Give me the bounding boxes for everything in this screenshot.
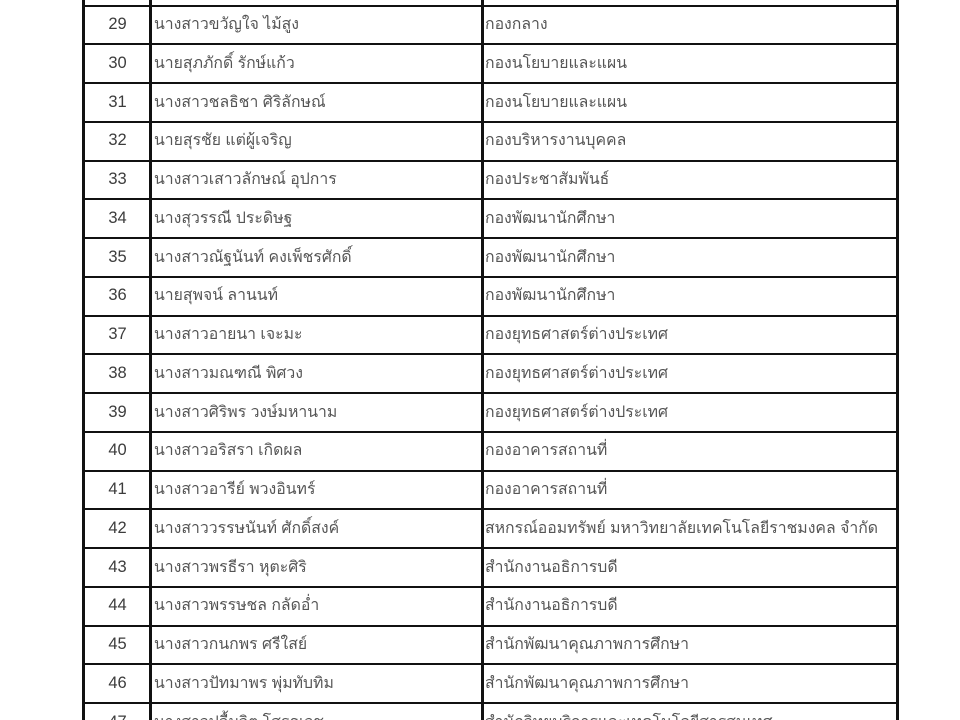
table row 34: นางสุวรรณี ประดิษฐ [154, 210, 292, 227]
table row 45: นางสาวกนกพร ศรีใสย์ [154, 636, 307, 653]
table row 37: กองยุทธศาสตร์ต่างประเทศ [485, 326, 668, 343]
table row 39 [108, 402, 668, 422]
table row 45 [108, 634, 689, 654]
table row 39: นางสาวศิริพร วงษ์มหานาม [154, 404, 337, 420]
table row 41: นางสาวอารีย์ พวงอินทร์ [154, 481, 315, 498]
table row 38: 38 [108, 364, 127, 382]
table row 37 [108, 325, 668, 344]
table row 40: 40 [108, 441, 127, 459]
table row 37: นางสาวอายนา เจะมะ [154, 326, 302, 343]
table row 45: สำนักพัฒนาคุณภาพการศึกษา [485, 636, 689, 653]
table row 37: 37 [108, 325, 127, 343]
table row 43 [108, 558, 618, 576]
table row 31 [108, 92, 627, 110]
table row 34: 34 [108, 209, 127, 227]
table row 29: นางสาวขวัญใจ ไม้สูง [154, 16, 299, 33]
table row 29: กองกลาง [485, 16, 548, 33]
table row 40 [108, 438, 607, 459]
table row 39: 39 [108, 402, 127, 420]
table row 30: กองนโยบายและแผน [485, 55, 627, 72]
table row 35: 35 [108, 248, 127, 266]
table row 33: กองประชาสัมพันธ์ [485, 171, 609, 188]
table row 35: กองพัฒนานักศึกษา [485, 248, 615, 266]
table row 46: 46 [108, 674, 127, 692]
table row 31: กองนโยบายและแผน [485, 94, 627, 110]
table row 44: 44 [108, 596, 127, 614]
table row 35 [108, 245, 615, 266]
table row 29 [108, 14, 548, 33]
table row 34 [108, 209, 615, 228]
table row 45: 45 [108, 635, 127, 653]
table row 42: สหกรณ์ออมทรัพย์ มหาวิทยาลัยเทคโนโลยีราชมงคล จำกัด [485, 520, 878, 537]
table row 39: กองยุทธศาสตร์ต่างประเทศ [485, 404, 668, 420]
table row 33: 33 [108, 170, 127, 188]
table row 32: นายสุรชัย แต่ผู้เจริญ [154, 132, 292, 149]
table row 41 [108, 478, 607, 498]
table row 42 [108, 516, 878, 537]
table row 30: นายสุภภักดิ์ รักษ์แก้ว [154, 55, 295, 72]
table row 38: กองยุทธศาสตร์ต่างประเทศ [485, 365, 668, 382]
table row 32: 32 [108, 131, 127, 149]
table row 30: 30 [108, 54, 127, 72]
table row 46: สำนักพัฒนาคุณภาพการศึกษา [485, 675, 689, 692]
table row 43: 43 [108, 558, 127, 576]
table row 46 [108, 674, 689, 692]
table row 42: 42 [108, 519, 127, 537]
table row 32 [108, 131, 626, 150]
table row 44 [108, 594, 618, 614]
table row 46: นางสาวปัทมาพร พุ่มทับทิม [154, 675, 334, 692]
table row 41: 41 [108, 480, 127, 498]
table row 36: กองพัฒนานักศึกษา [485, 287, 615, 304]
table row 43: สำนักงานอธิการบดี [485, 558, 618, 576]
table row 44: นางสาวพรรษชล กลัดอ่ำ [154, 597, 319, 614]
table row 29: 29 [108, 15, 127, 33]
table row 41: กองอาคารสถานที่ [485, 481, 607, 498]
table row 38: นางสาวมณฑณี พิศวง [154, 365, 303, 382]
table row 36 [108, 286, 615, 304]
table row 40: นางสาวอริสรา เกิดผล [154, 442, 302, 459]
table row 47 [108, 710, 773, 720]
table row 30 [108, 51, 627, 72]
table row 40: กองอาคารสถานที่ [485, 442, 607, 459]
table row 35: นางสาวณัฐนันท์ คงเพ็ชรศักดิ์ [154, 248, 352, 266]
table row 31: นางสาวชลธิชา ศิริลักษณ์ [154, 94, 326, 110]
table row 42: นางสาววรรษนันท์ ศักดิ์สงค์ [154, 520, 339, 537]
table row 36: นายสุพจน์ ลานนท์ [154, 287, 278, 304]
table row 31: 31 [108, 92, 127, 110]
table row 34: กองพัฒนานักศึกษา [485, 210, 615, 227]
table row 38 [108, 364, 668, 382]
table row 32: กองบริหารงานบุคคล [485, 132, 626, 149]
table row 33 [108, 170, 609, 188]
table row 33: นางสาวเสาวลักษณ์ อุปการ [154, 171, 337, 188]
table row 44: สำนักงานอธิการบดี [485, 597, 618, 614]
table row 36: 36 [108, 286, 127, 304]
table row 43: นางสาวพรธีรา หุตะศิริ [154, 558, 307, 576]
